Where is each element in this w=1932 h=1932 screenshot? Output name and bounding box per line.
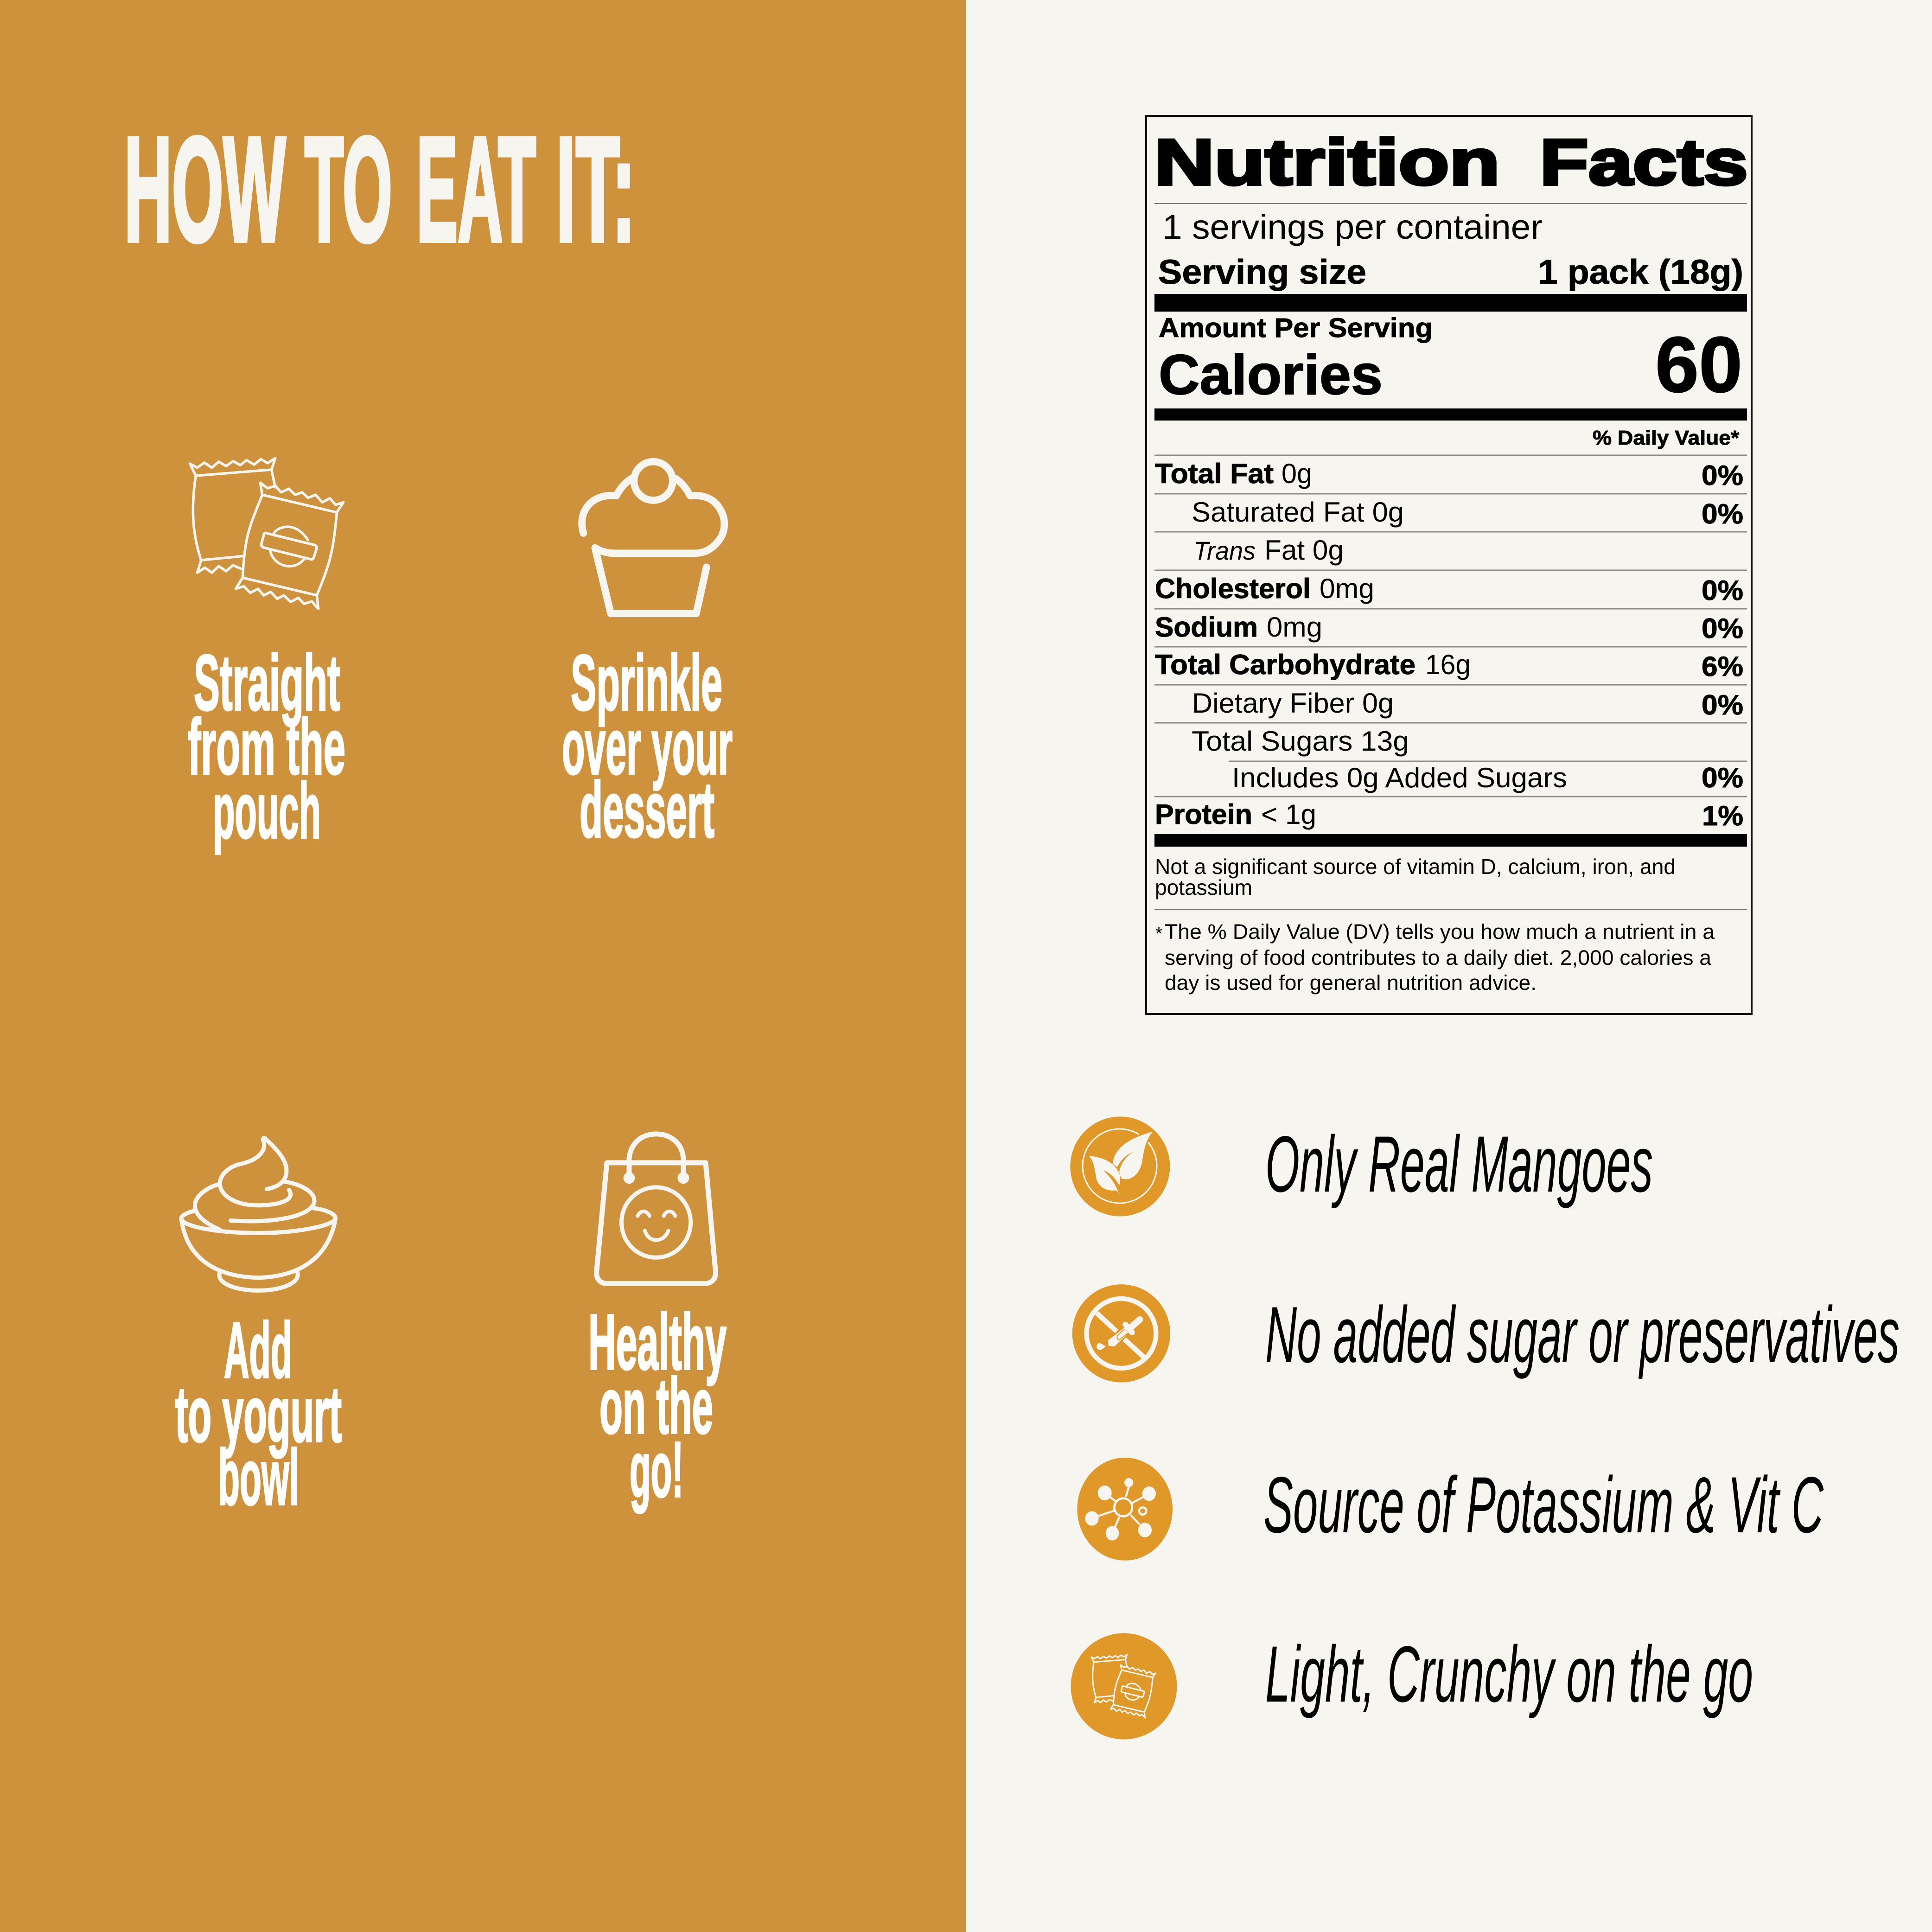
label: straight from the pouch: from the <box>188 703 345 791</box>
row: total fat: Total Fat <box>1155 458 1274 489</box>
heading: nutrition facts: Facts <box>1540 126 1748 198</box>
row: total sugars: Total Sugars 13g <box>1192 726 1409 757</box>
panel: how to eat it: over your <box>562 703 733 791</box>
row: protein <box>1155 799 1743 831</box>
row: total fat <box>1155 458 1743 491</box>
row: protein: 1% <box>1702 800 1743 831</box>
row: trans fat: Trans <box>1193 536 1256 565</box>
title: HOW <box>124 106 286 272</box>
title: EAT <box>416 106 536 272</box>
row: added sugars: Includes 0g Added Sugars <box>1232 762 1567 793</box>
text: calories label: Calories <box>1159 343 1383 406</box>
row: cholesterol: 0% <box>1702 575 1743 606</box>
label: add to yogurt bowl: Add <box>224 1307 292 1395</box>
row: saturated fat: 0% <box>1702 498 1743 529</box>
text: amount per serving: Amount Per Serving <box>1159 313 1433 343</box>
label: straight from the pouch: pouch <box>213 767 321 855</box>
panel: how to eat it: Healthy <box>588 1298 727 1386</box>
label: add to yogurt bowl <box>175 1307 342 1522</box>
text: serving size: Serving size <box>1158 253 1366 291</box>
row: protein: Protein <box>1155 799 1252 830</box>
icon: pouches <box>190 458 344 609</box>
icon: smiley bag <box>597 1134 716 1284</box>
text: daily value footnote: day is used for general nutrition advice. <box>1165 971 1537 995</box>
row: protein: < 1g <box>1261 799 1316 830</box>
icon: leaves badge <box>1070 1116 1170 1216</box>
row: total carbohydrate: Total Carbohydrate <box>1155 649 1416 680</box>
label: sprinkle over your dessert: dessert <box>580 766 714 854</box>
text: not a significant source: potassium <box>1155 875 1252 899</box>
panel: nutrition facts <box>1146 116 1752 1014</box>
text: calories value: 60 <box>1655 321 1742 409</box>
row: saturated fat <box>1192 497 1743 529</box>
text: daily value footnote: * <box>1155 924 1162 944</box>
text: not a significant source: Not a significant source of vitamin D, calcium, iron, and <box>1155 854 1676 879</box>
row: sodium: Sodium <box>1155 612 1258 643</box>
row: dietary fiber: Dietary Fiber 0g <box>1192 688 1394 719</box>
row: cholesterol: 0mg <box>1320 573 1374 604</box>
text: daily value footnote <box>1155 920 1715 995</box>
row: trans fat <box>1193 535 1344 566</box>
label: healthy on the go: on the <box>599 1362 713 1450</box>
row: sodium: 0mg <box>1267 612 1322 643</box>
row: sodium <box>1155 612 1743 644</box>
heading: nutrition facts: Nutrition <box>1154 126 1500 198</box>
row: added sugars <box>1232 762 1743 793</box>
row: cholesterol <box>1155 573 1743 606</box>
label: healthy on the go: go! <box>630 1426 683 1514</box>
icon: molecule badge <box>1077 1458 1173 1561</box>
icon: pouches badge <box>1071 1633 1177 1740</box>
row: dietary fiber: 0% <box>1702 689 1743 721</box>
row: total carbohydrate: 16g <box>1425 649 1471 680</box>
row: total carbohydrate <box>1155 649 1743 682</box>
row: cholesterol: Cholesterol <box>1155 573 1311 604</box>
icon: cupcake <box>582 462 724 613</box>
row: saturated fat: Saturated Fat 0g <box>1192 497 1404 528</box>
panel: how to eat it <box>0 0 966 1932</box>
title: TO <box>305 106 392 272</box>
text: serving size <box>1158 253 1743 291</box>
row: dietary fiber <box>1192 688 1743 721</box>
text: not a significant source <box>1155 854 1676 899</box>
row: sodium: 0% <box>1702 613 1743 644</box>
heading: nutrition facts <box>1154 126 1748 198</box>
label: straight from the pouch <box>188 639 345 855</box>
text: daily value footnote: serving of food contributes to a daily diet. 2,000 calories a <box>1165 946 1712 969</box>
label: sprinkle over your dessert: Sprinkle <box>571 639 722 727</box>
text: serving size: 1 pack (18g) <box>1538 253 1743 291</box>
text: daily value footnote: The % Daily Value (DV) tells you how much a nutrient in a <box>1165 920 1715 944</box>
icon: yogurt bowl <box>181 1138 336 1290</box>
row: trans fat: Fat 0g <box>1264 535 1344 566</box>
panel: how to eat it: to yogurt <box>175 1371 342 1459</box>
label: healthy on the go <box>588 1298 727 1514</box>
icon: no preservatives badge <box>1072 1284 1170 1382</box>
row: added sugars: 0% <box>1702 762 1743 793</box>
text: servings per container: 1 servings per container <box>1162 208 1543 246</box>
label: add to yogurt bowl: bowl <box>218 1434 299 1522</box>
panel: how to eat it: IT: <box>556 106 636 272</box>
label: straight from the pouch: Straight <box>194 639 340 727</box>
text: percent daily value: % Daily Value* <box>1593 427 1740 449</box>
label: sprinkle over your dessert <box>562 639 733 854</box>
row: total fat: 0% <box>1702 460 1743 491</box>
row: total fat: 0g <box>1282 458 1312 489</box>
row: total carbohydrate: 6% <box>1702 651 1743 682</box>
